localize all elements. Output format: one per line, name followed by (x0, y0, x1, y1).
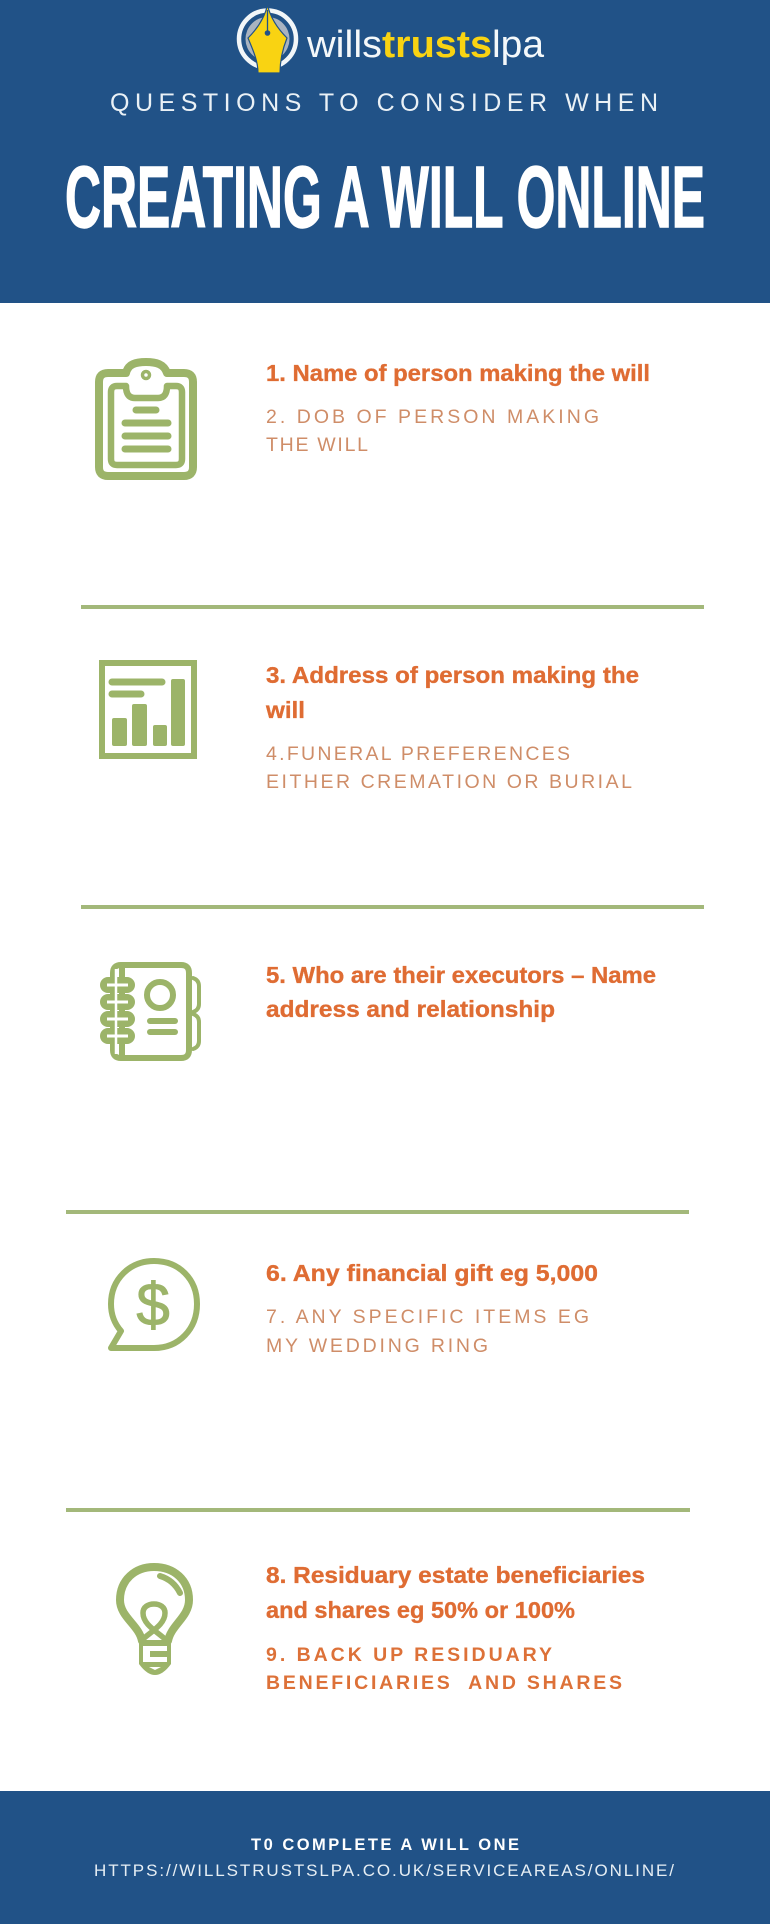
panel: questions 3 and 4 (102, 662, 639, 793)
question 5: address and relationship (266, 996, 555, 1022)
footer heading: T0 COMPLETE A WILL ONE (251, 1836, 519, 1854)
question 3: will (265, 697, 305, 723)
logo (239, 5, 545, 73)
icon: dollar speech bubble: $ (136, 1271, 170, 1338)
question 8: and shares eg 50% or 100% (266, 1597, 575, 1623)
question 7: 7. ANY SPECIFIC ITEMS EG (266, 1306, 589, 1328)
question 2: 2. DOB OF PERSON MAKING (266, 406, 599, 428)
icon: dollar speech bubble (111, 1261, 197, 1348)
wordmark: wills (306, 24, 382, 66)
question 6: 6. Any financial gift eg 5,000 (266, 1260, 598, 1286)
question 1: 1. Name of person making the will (266, 360, 650, 386)
panel: questions 6 and 7 (111, 1260, 598, 1357)
question 9: 9. BACK UP RESIDUARY (266, 1644, 552, 1666)
panel: footer (0, 1791, 770, 1924)
icon: light bulb (120, 1567, 189, 1675)
icon: clipboard (99, 362, 193, 476)
panel: questions 1 and 2 (99, 360, 650, 476)
wordmark: lpa (492, 24, 545, 66)
panel: question 5 (100, 962, 656, 1058)
question 8: 8. Residuary estate beneficiaries (266, 1562, 645, 1588)
question 4: 4.FUNERAL PREFERENCES (266, 743, 570, 765)
wordmark (306, 24, 545, 66)
wordmark: trusts (382, 24, 492, 66)
icon: pen nib in ring (239, 5, 296, 73)
panel: questions 8 and 9 (120, 1562, 645, 1694)
question 5 (266, 962, 656, 1022)
panel: header (0, 0, 770, 303)
subtitle: QUESTIONS TO CONSIDER WHEN (110, 89, 658, 117)
question 7: MY WEDDING RING (266, 1335, 488, 1357)
icon: chart report (102, 663, 194, 756)
icon: address book (100, 965, 199, 1058)
question 3 (265, 662, 639, 723)
question 4 (266, 743, 632, 793)
question 5: 5. Who are their executors – Name (266, 962, 656, 988)
question 8 (266, 1562, 645, 1623)
question 3: 3. Address of person making the (266, 662, 639, 688)
question 9: BENEFICIARIES AND SHARES (266, 1672, 622, 1694)
question 9 (266, 1644, 622, 1694)
question 2: THE WILL (266, 434, 368, 456)
question 4: EITHER CREMATION OR BURIAL (266, 771, 632, 793)
question 2 (266, 406, 599, 456)
question 7 (266, 1306, 589, 1357)
footer url: HTTPS://WILLSTRUSTSLPA.CO.UK/SERVICEAREAS/ONLINE/ (94, 1861, 674, 1880)
